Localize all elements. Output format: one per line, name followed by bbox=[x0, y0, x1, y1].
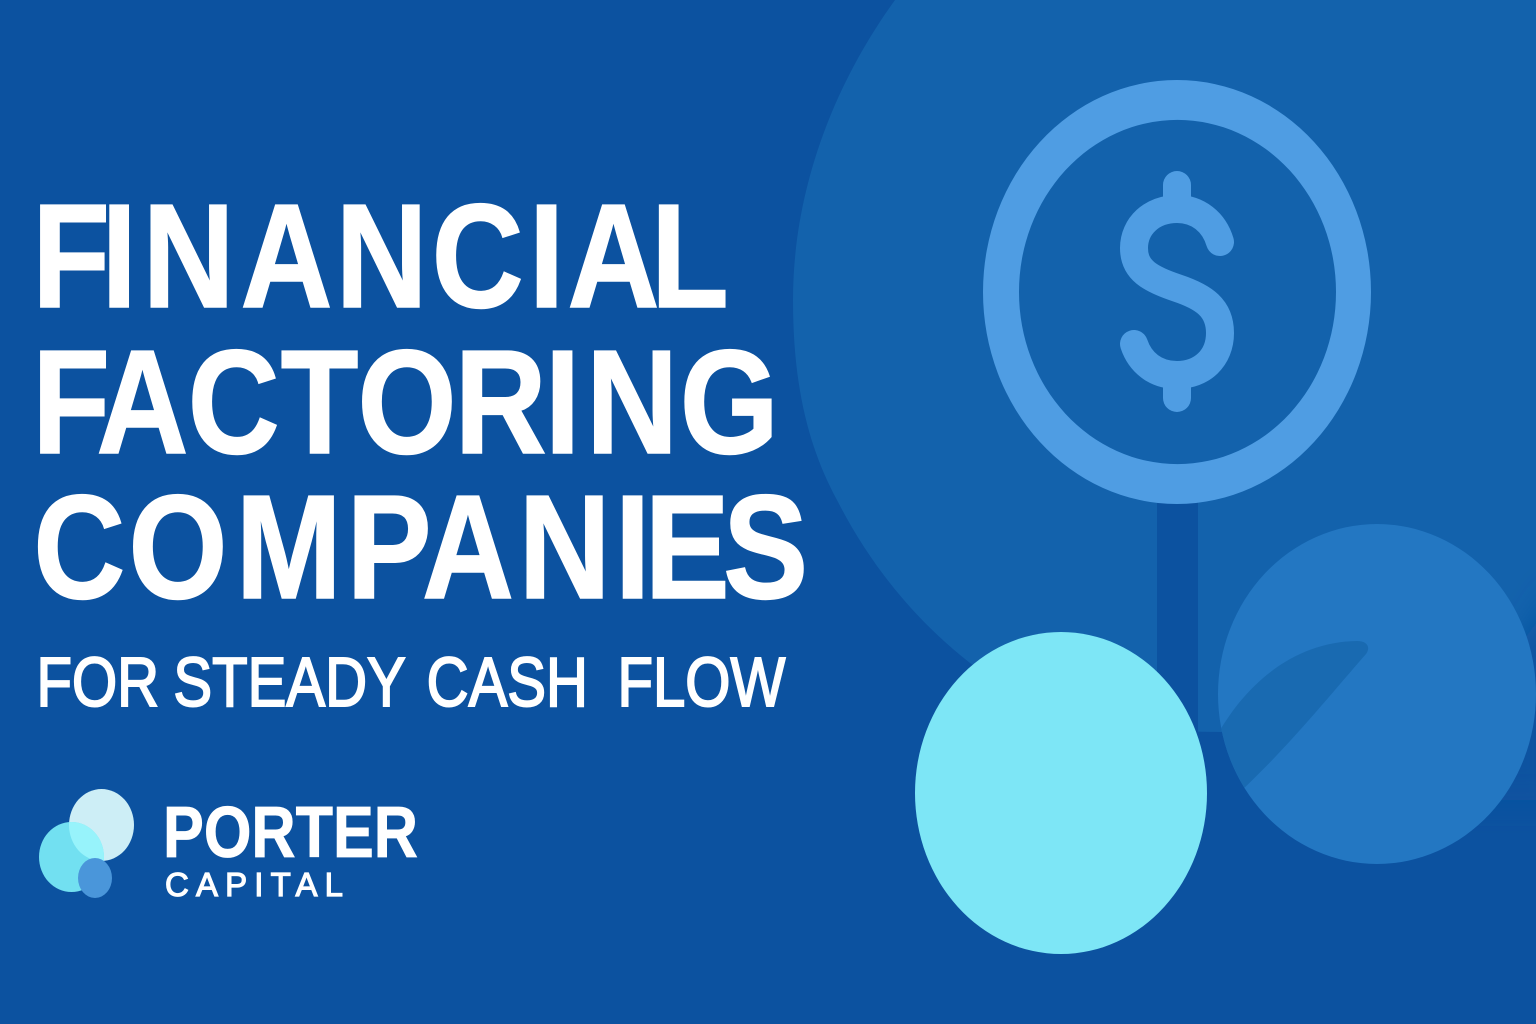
blue circle with leaf bbox=[1205, 524, 1536, 864]
logo wordmark bbox=[163, 793, 418, 903]
leaf shape bbox=[1222, 641, 1368, 788]
cyan circle bbox=[915, 632, 1207, 954]
stem below coin bbox=[1157, 500, 1198, 740]
subtitle: FOR bbox=[37, 643, 159, 721]
title: FINANCIAL bbox=[32, 174, 729, 339]
title bbox=[32, 174, 808, 630]
large background circle bbox=[793, 0, 1536, 732]
logo wordmark: PORTER bbox=[163, 793, 418, 873]
subtitle: STEADY bbox=[173, 643, 406, 721]
icon: dollar coin bbox=[983, 80, 1371, 504]
subtitle: FLOW bbox=[618, 643, 786, 721]
title: FACTORING bbox=[32, 320, 779, 485]
logo mark bbox=[39, 789, 134, 898]
title: COMPANIES bbox=[33, 465, 808, 630]
logo wordmark: CAPITAL bbox=[165, 866, 343, 903]
soft shadow at right edge bbox=[1420, 585, 1536, 800]
icon: dollar sign bbox=[1134, 185, 1220, 398]
subtitle: CASH bbox=[427, 643, 588, 721]
